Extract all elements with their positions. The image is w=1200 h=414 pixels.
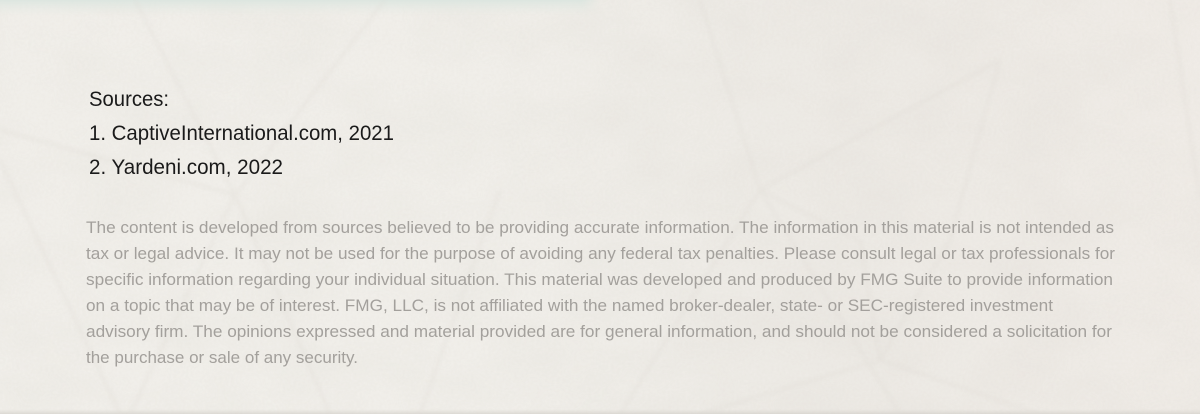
sources heading: Sources: bbox=[89, 88, 169, 111]
disclosure text: on a topic that may be of interest. FMG, LLC, is not affiliated with the named broker-dealer, state- or SEC-registered investment bbox=[86, 297, 1053, 315]
disclosure text: advisory firm. The opinions expressed and material provided are for general information, and should not be considered a solicitation for bbox=[86, 323, 1113, 341]
disclosure text bbox=[86, 219, 1116, 367]
disclosure text: specific information regarding your individual situation. This material was developed and produced by FMG Suite to provide information bbox=[86, 271, 1113, 289]
source 2: 2. Yardeni.com, 2022 bbox=[89, 156, 283, 179]
disclosure text: The content is developed from sources believed to be providing accurate information. The information in this material is not intended as bbox=[86, 219, 1114, 237]
source 1: 1. CaptiveInternational.com, 2021 bbox=[89, 122, 394, 145]
disclosure text: tax or legal advice. It may not be used for the purpose of avoiding any federal tax penalties. Please consult legal or tax professionals for bbox=[86, 245, 1116, 263]
disclosure text: the purchase or sale of any security. bbox=[86, 349, 358, 367]
sources list bbox=[89, 88, 394, 179]
